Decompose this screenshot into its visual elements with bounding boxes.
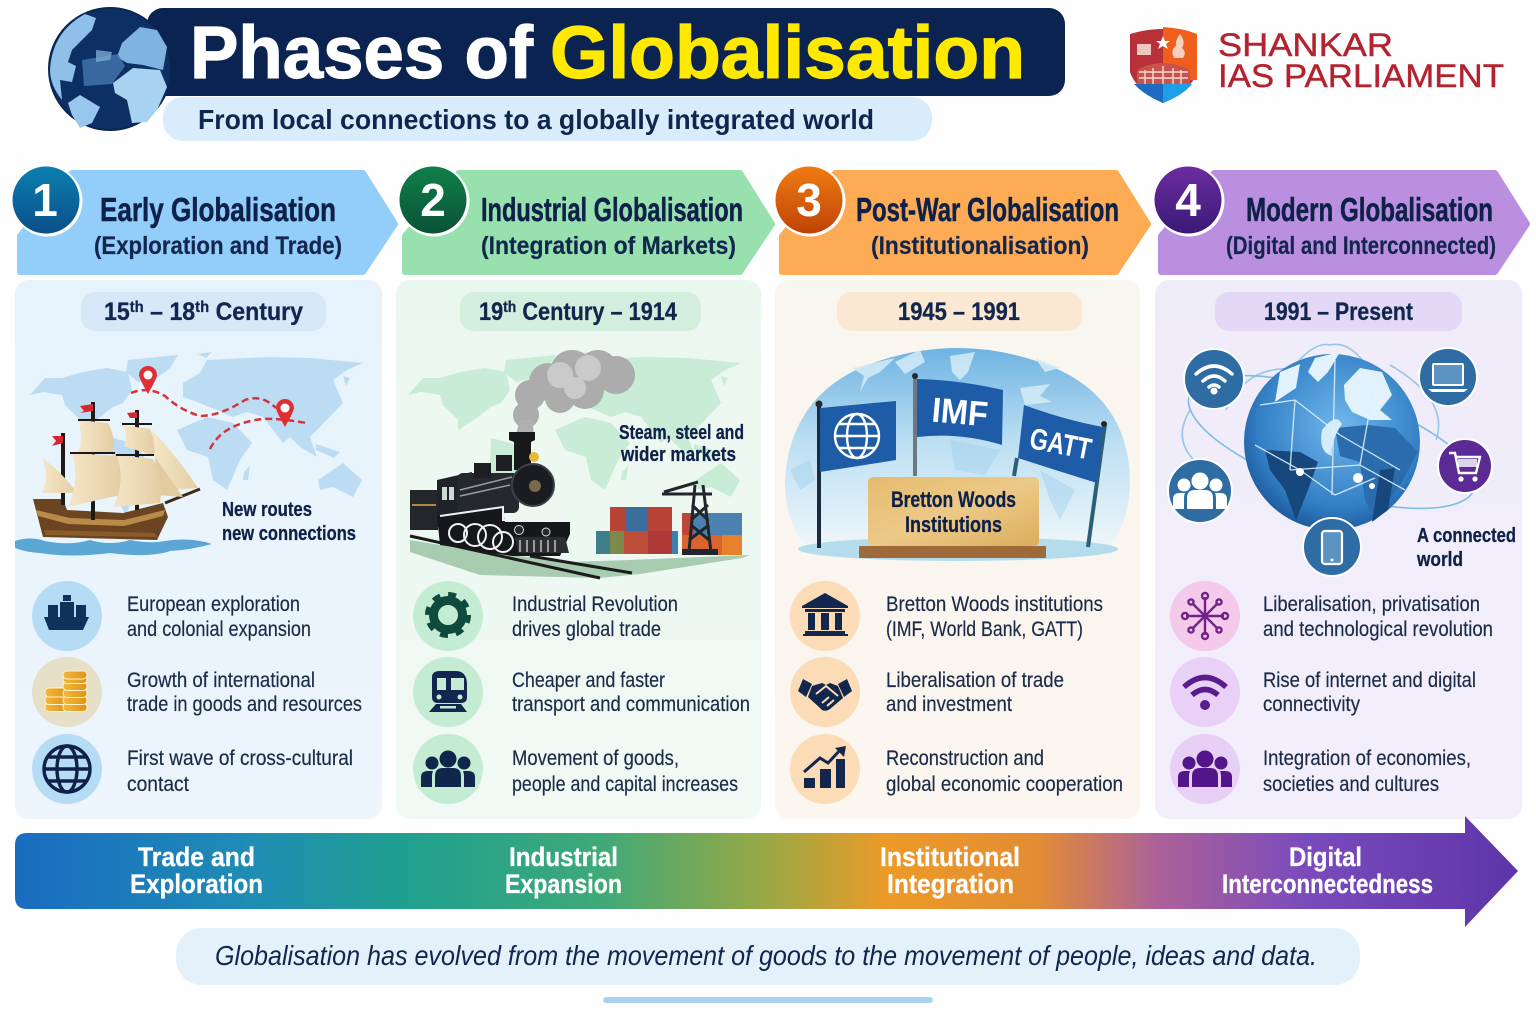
list item: liberalisation [1170,581,1493,651]
list item: Bretton Woods institutions: (IMF, World Bank, GATT) [886,618,1083,641]
flag label: GATT: GATT [1027,422,1094,467]
title highlight word: Globalisation [550,11,1025,94]
icon: phone node [1303,518,1361,576]
badge: number 1: 1 [32,174,58,226]
chevron: phase 1: (Exploration and Trade) [94,232,342,260]
icon: people node [1168,459,1232,523]
list item: cross-cultural contact: First wave of cross-cultural [127,747,353,770]
list item: transport [413,657,750,727]
caption: New routes [222,499,312,521]
period pill: th [195,299,209,316]
badge: number 2 [398,166,470,236]
list item: reconstruction [790,734,1123,804]
stage: institutional integration: Integration [887,869,1014,899]
list item: integration: societies and cultures [1263,773,1439,796]
list item: internet connectivity: Rise of internet and digital [1263,669,1476,692]
period pill: th [503,299,516,316]
illustration: connected globe [1168,344,1516,576]
stage: institutional integration [880,842,1020,899]
list item: liberalisation: and technological revolution [1263,618,1493,641]
list item: internet connectivity: connectivity [1263,693,1360,716]
list item: movement of goods [413,734,738,804]
caption: new connections [222,523,356,545]
list item: international trade: trade in goods and resources [127,693,362,716]
logo wordmark line 2: IAS PARLIAMENT [1218,58,1504,94]
period pill [837,292,1082,331]
list item: Industrial Revolution [413,581,678,651]
list item: integration [1170,734,1471,804]
stage: trade and exploration [130,842,263,899]
list item: European exploration: European exploration [127,593,300,616]
list item: trade liberalisation: and investment [886,693,1012,716]
chevron: phase 2: Industrial Globalisation [481,191,743,228]
panel: phase 3 post-war globalisation [775,280,1140,819]
list item: transport: transport and communication [512,693,750,716]
period pill: Century – 1914 [516,298,677,326]
list item: Bretton Woods institutions: Bretton Woods institutions [886,593,1103,616]
stage: trade and exploration: Exploration [130,869,263,899]
badge: number 1 [12,166,82,236]
panel: phase 2 industrial globalisation [396,280,761,819]
caption [1416,525,1516,571]
plaque text [891,487,1016,537]
list item: reconstruction: Reconstruction and [886,747,1044,770]
caption: A connected [1417,525,1516,547]
list item: international trade [32,657,362,727]
list item: reconstruction: global economic cooperation [886,773,1123,796]
badge: number 3: 3 [796,174,822,226]
period pill [1215,292,1462,331]
panel: phase 1 early globalisation [15,280,382,819]
chevron: phase 4 [1161,173,1527,272]
period pill [81,292,326,331]
period pill: 15 [104,298,132,326]
list item: integration: Integration of economies, [1263,747,1471,770]
chevron: phase 1 [20,173,395,272]
logo wordmark line 1: SHANKAR [1218,27,1393,63]
flag label: IMF: IMF [930,391,990,434]
stage: industrial expansion [505,842,622,899]
stage: industrial expansion: Expansion [505,869,622,899]
list item: trade liberalisation: Liberalisation of trade [886,669,1064,692]
subtitle pill [163,97,932,141]
illustration: world map, routes and sailing ship [15,352,363,556]
badge: number 2: 2 [420,174,446,226]
closing statement: Globalisation has evolved from the movement of goods to the movement of people, ideas and data. [215,940,1317,971]
plaque text: Institutions [905,512,1002,537]
logo: Shankar IAS Parliament [1130,27,1393,103]
chevron: phase 1: Early Globalisation [100,191,336,228]
chevron: phase 2 [405,173,772,272]
subtitle pill: From local connections to a globally integrated world [198,104,874,135]
period pill: 19 [479,298,507,326]
list item: liberalisation: Liberalisation, privatisation [1263,593,1480,616]
list item: transport: Cheaper and faster [512,669,665,692]
chevron: phase 3: Post-War Globalisation [856,191,1119,228]
stage: industrial expansion: Industrial [509,842,618,872]
list item: Bretton Woods institutions [790,581,1103,651]
list item: European exploration [32,581,311,651]
illustration: steam train and containers [408,350,750,578]
list item: movement of goods: people and capital increases [512,773,738,796]
caption: world [1416,549,1463,571]
badge: number 4 [1154,166,1224,236]
stage: institutional integration: Institutional [880,842,1020,872]
icon: header globe [49,8,171,130]
list item: movement of goods: Movement of goods, [512,747,679,770]
stage: digital interconnectedness: Interconnectedness [1222,869,1433,899]
icon: shopping cart node [1438,439,1492,493]
icon: laptop node [1419,348,1477,406]
icon: wifi node [1184,349,1244,409]
list item: cross-cultural contact [32,734,353,804]
closing statement [176,928,1360,985]
period pill [460,292,701,331]
caption: wider markets [620,444,736,466]
title banner [147,8,1065,96]
badge: number 4: 4 [1175,174,1201,226]
chevron: phase 2: (Integration of Markets) [481,232,736,260]
list item: Industrial Revolution: drives global trade [512,618,661,641]
caption: Steam, steel and [619,422,744,444]
chevron: phase 3 [782,173,1148,272]
chevron: phase 3: (Institutionalisation) [871,232,1089,260]
list item: international trade: Growth of international [127,669,315,692]
stage: digital interconnectedness [1222,842,1433,899]
caption [222,499,356,545]
period pill: 1991 – Present [1264,298,1414,326]
list item: Industrial Revolution: Industrial Revolution [512,593,678,616]
caption [619,422,744,466]
title text: Phases of [190,11,533,94]
panel: phase 4 modern globalisation [1155,280,1522,819]
list item: cross-cultural contact: contact [127,773,189,796]
list item: European exploration: and colonial expansion [127,618,311,641]
period pill: – 18 [144,298,195,326]
period pill: 1945 – 1991 [898,298,1020,326]
period pill: th [130,299,144,316]
badge: number 3 [774,166,846,236]
timeline arrow [15,816,1518,927]
period pill: Century [209,298,303,326]
stage: trade and exploration: Trade and [138,842,255,872]
stage: digital interconnectedness: Digital [1289,842,1362,872]
illustration: flags and Bretton Woods plaque [785,348,1130,561]
plaque text: Bretton Woods [891,487,1016,512]
list item: internet connectivity [1170,657,1476,727]
list item: trade liberalisation [790,657,1064,727]
